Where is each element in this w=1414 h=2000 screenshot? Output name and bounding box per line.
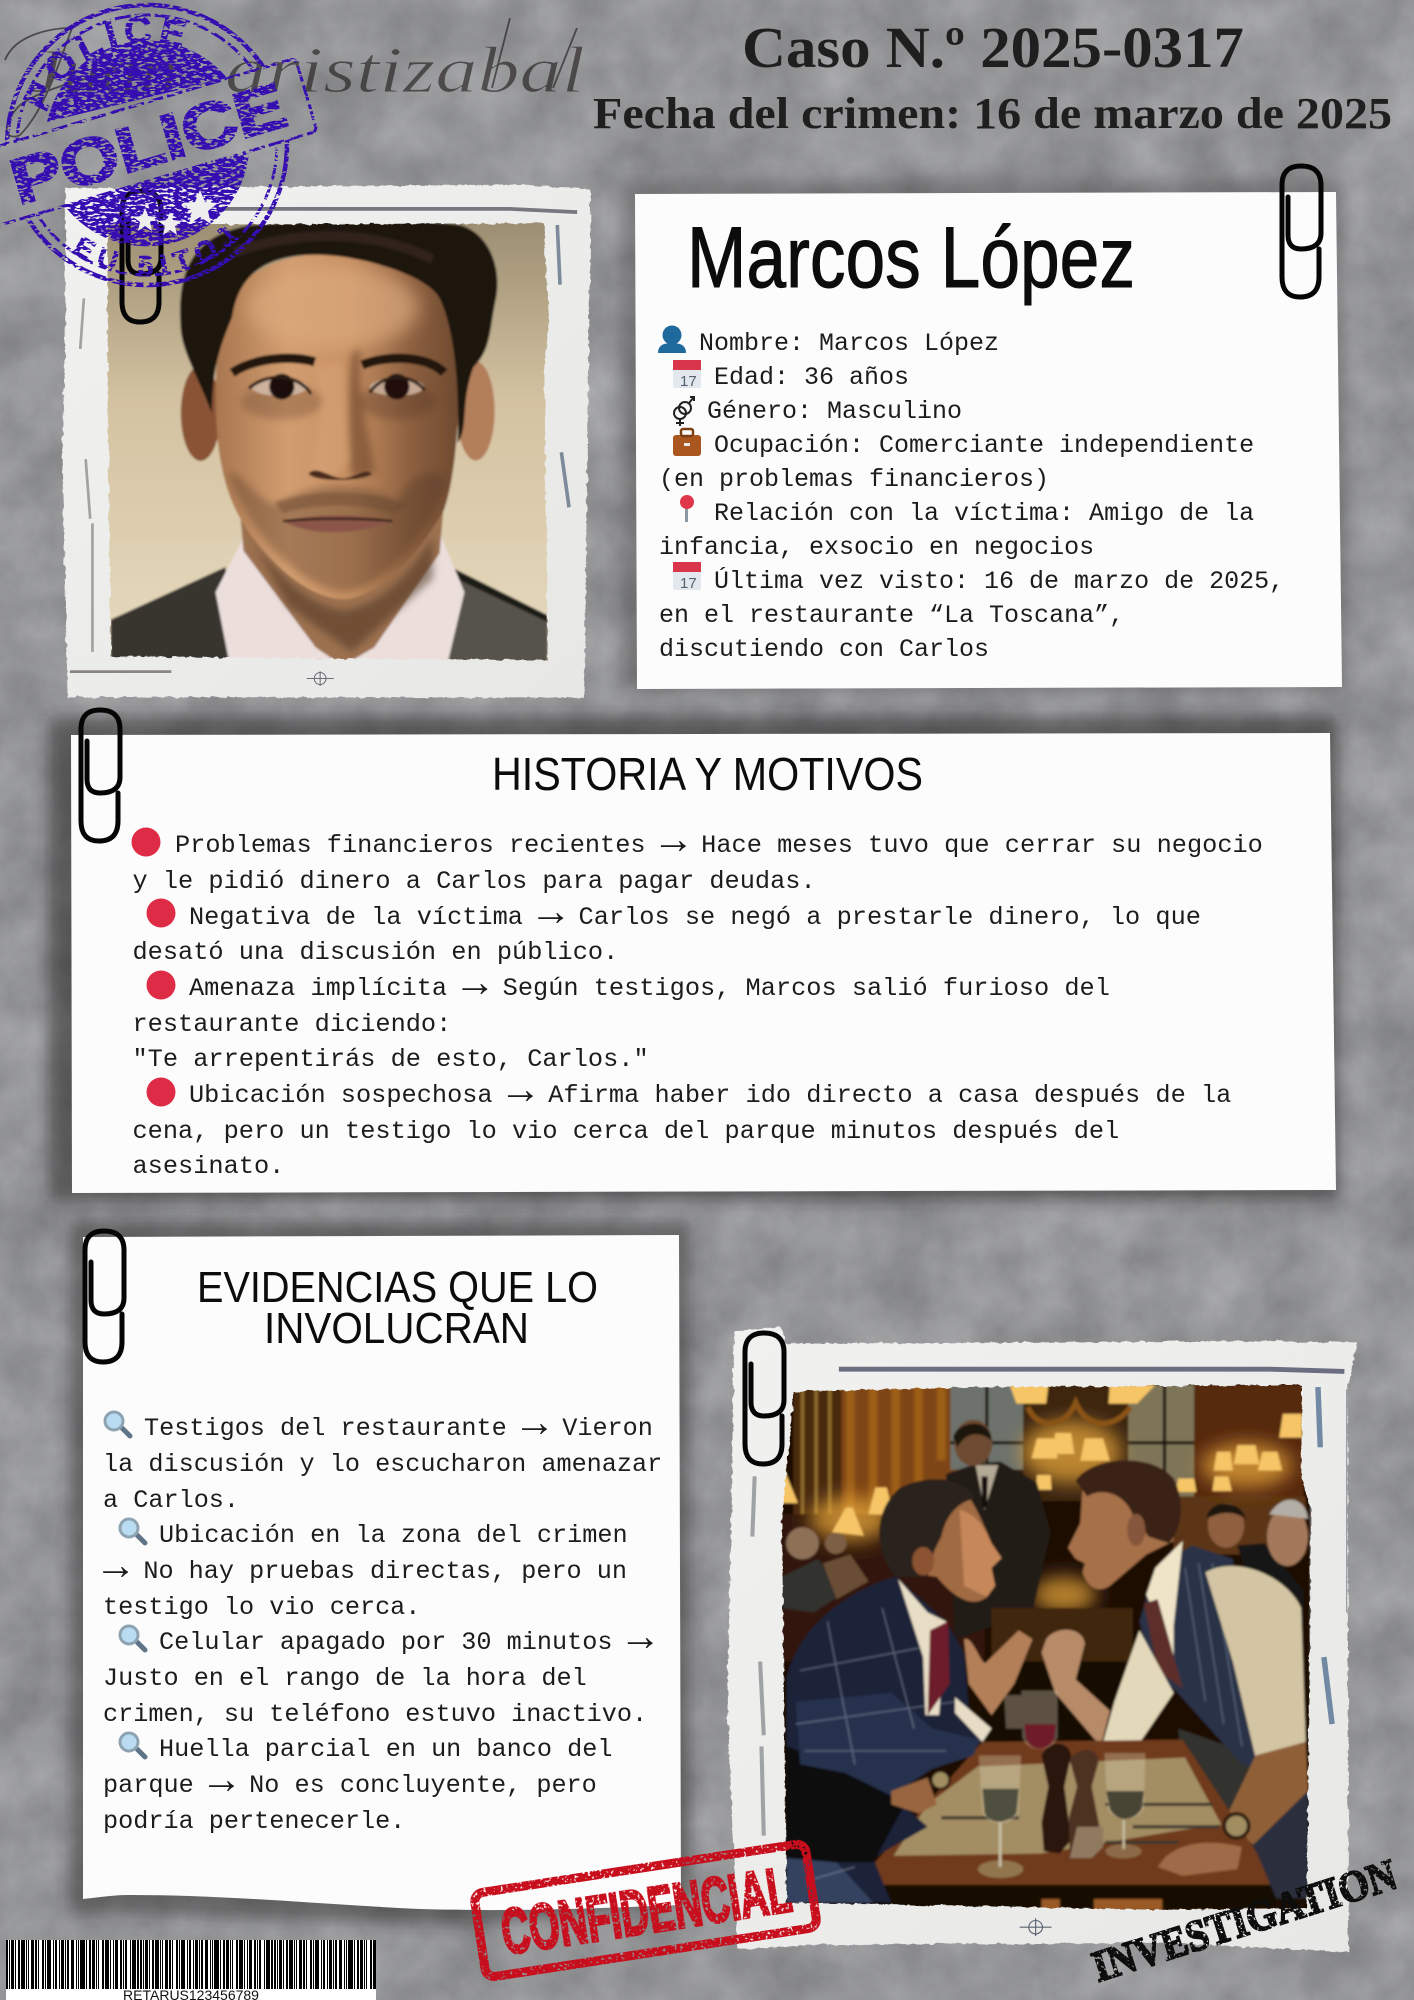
evidence text: →	[522, 1401, 548, 1449]
story text: Negativa de la víctima	[189, 903, 523, 932]
portrait photo frame	[62, 185, 591, 698]
story text: restaurante diciendo:	[132, 1010, 451, 1039]
police stamp	[0, 2, 318, 288]
paperclip on portrait	[122, 191, 161, 322]
header: case number: Caso N.º 2025-0317	[742, 15, 1244, 80]
evidence text: crimen, su teléfono estuvo inactivo.	[103, 1700, 647, 1729]
icon: magnifier	[120, 1626, 145, 1650]
story text: "Te arrepentirás de esto, Carlos."	[132, 1045, 649, 1074]
heading: INVOLUCRAN	[264, 1304, 529, 1353]
evidence text: a Carlos.	[103, 1486, 239, 1515]
icon: magnifier	[105, 1412, 130, 1436]
heading: HISTORIA Y MOTIVOS	[492, 748, 923, 800]
police stamp: EU 5ITOJ	[74, 224, 235, 274]
panel: profile card	[635, 192, 1342, 689]
profile text: en el restaurante “La Toscana”,	[659, 601, 1124, 630]
profile text: discutiendo con Carlos	[659, 635, 989, 664]
restaurant photo frame	[727, 1327, 1357, 1952]
evidence text: parque	[103, 1771, 194, 1800]
evidence text: podría pertenecerle.	[103, 1807, 405, 1836]
profile text: infancia, exsocio en negocios	[659, 533, 1094, 562]
card shadow: profile	[622, 180, 1344, 690]
story text: Ubicación sospechosa	[189, 1081, 493, 1110]
panel: evidencias	[83, 1235, 681, 1910]
profile text: Última vez visto: 16 de marzo de 2025,	[714, 566, 1284, 596]
signature	[5, 18, 585, 137]
icon: magnifier	[120, 1519, 145, 1543]
torn paper frame	[62, 185, 591, 698]
evidence text: Testigos del restaurante	[144, 1414, 507, 1443]
confidencial stamp: CONFIDENCIAL	[496, 1853, 796, 1969]
profile text: Nombre: Marcos López	[699, 329, 999, 358]
evidence text: Huella parcial en un banco del	[159, 1735, 612, 1764]
story text: →	[538, 890, 564, 938]
evidence text: Ubicación en la zona del crimen	[159, 1521, 628, 1550]
paperclip on evidence panel	[85, 1231, 124, 1362]
icon: briefcase	[673, 429, 701, 456]
stamp stars	[133, 190, 218, 235]
icon: magnifier	[120, 1733, 145, 1757]
evidence text: testigo lo vio cerca.	[103, 1593, 420, 1622]
profile text: Género: Masculino	[707, 397, 962, 426]
story text: asesinato.	[132, 1152, 284, 1181]
police stamp: POLICE	[22, 16, 186, 112]
red bullets	[132, 828, 176, 1106]
barcode	[6, 1940, 376, 2000]
portrait of Marcos López	[101, 216, 552, 670]
profile text: Edad: 36 años	[714, 363, 909, 392]
profile text: Ocupación: Comerciante independiente	[714, 431, 1254, 460]
story text: Afirma haber ido directo a casa después de la	[533, 1081, 1231, 1110]
evidence text: Justo en el rango de la hora del	[103, 1664, 587, 1693]
story text: →	[508, 1068, 534, 1116]
torn paper frame	[727, 1327, 1357, 1952]
evidence text: →	[628, 1615, 654, 1663]
icon: calendar: 17	[680, 373, 697, 390]
restaurant argument scene	[780, 1380, 1310, 1912]
evidence text: No es concluyente, pero	[234, 1771, 597, 1800]
card shadow: evidence	[70, 1222, 690, 1925]
story text	[132, 818, 1263, 1181]
profile text: (en problemas financieros)	[659, 465, 1049, 494]
signature: aristizabal	[225, 34, 585, 107]
story text: y le pidió dinero a Carlos para pagar deudas.	[132, 867, 816, 896]
icon: pin	[680, 495, 694, 522]
confidencial stamp	[474, 1843, 818, 1978]
story text: Problemas financieros recientes	[175, 831, 646, 860]
story text: cena, pero un testigo lo vio cerca del parque minutos después del	[132, 1117, 1119, 1146]
evidence text: No hay pruebas directas, pero un	[128, 1557, 627, 1586]
story text: Hace meses tuvo que cerrar su negocio	[686, 831, 1263, 860]
paperclip on profile card	[1282, 166, 1321, 297]
story text: →	[462, 961, 488, 1009]
left man	[787, 1479, 1032, 1903]
profile text: Relación con la víctima: Amigo de la	[714, 499, 1254, 528]
story text: Carlos se negó a prestarle dinero, lo que	[563, 903, 1201, 932]
name heading: Marcos López	[687, 210, 1135, 306]
story text: Amenaza implícita	[189, 974, 447, 1003]
forearm and hand on table	[1158, 1791, 1308, 1898]
waiter	[946, 1420, 1051, 1639]
icon: person	[658, 326, 686, 353]
story text: Según testigos, Marcos salió furioso del	[487, 974, 1110, 1003]
heading: EVIDENCIAS QUE LO	[197, 1263, 598, 1312]
story text: →	[661, 818, 687, 866]
signature: Juan	[28, 38, 178, 106]
icon: calendar	[673, 360, 701, 390]
story text: desató una discusión en público.	[132, 938, 618, 967]
paperclip on story panel	[81, 710, 120, 841]
heading	[197, 1263, 598, 1353]
icon: gender symbol	[674, 397, 694, 426]
evidence text: →	[209, 1758, 235, 1806]
diners	[782, 1527, 868, 1612]
icon: calendar: 17	[680, 575, 697, 592]
paperclip on restaurant photo	[745, 1333, 784, 1464]
police stamp: POLICE	[2, 69, 294, 218]
evidence text: →	[103, 1544, 129, 1592]
table	[857, 1691, 1276, 1910]
icon: calendar	[673, 562, 701, 592]
profile text	[659, 329, 1284, 664]
header: crime date: Fecha del crimen: 16 de marzo de 2025	[593, 89, 1392, 138]
right man	[1042, 1460, 1308, 1898]
panel: historia y motivos	[71, 733, 1336, 1193]
card shadow: story	[48, 716, 1338, 1200]
evidence text: Celular apagado por 30 minutos	[159, 1628, 612, 1657]
evidence text: la discusión y lo escucharon amenazar	[103, 1450, 662, 1479]
evidence text: Vieron	[547, 1414, 653, 1443]
evidence text	[103, 1401, 662, 1836]
